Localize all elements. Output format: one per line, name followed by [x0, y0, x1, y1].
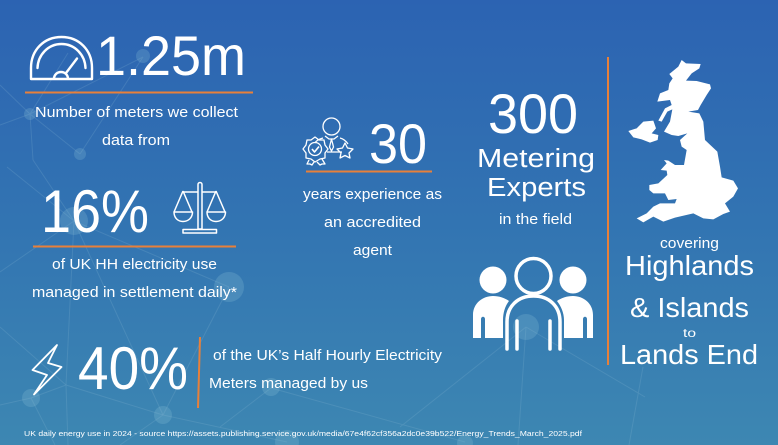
- caption: years experience: [303, 187, 442, 259]
- stat: 1.25m: 1.25m: [96, 24, 246, 87]
- caption: half hourly meters: Meters managed by us: [209, 376, 368, 392]
- panel: years experience stat: [303, 112, 442, 259]
- divider line: [33, 246, 236, 248]
- heading: metering experts: Metering: [477, 145, 595, 173]
- vertical divider: [198, 337, 200, 408]
- icon: balance scales: [174, 182, 226, 233]
- caption: years experience: agent: [353, 243, 392, 259]
- caption: meters: data from: [102, 133, 170, 149]
- coverage text: Highlands: [625, 250, 754, 281]
- divider line: [25, 92, 253, 94]
- panel: meters stat: [25, 24, 253, 149]
- panel: UK coverage: [620, 60, 758, 370]
- caption: years experience: an accredited: [324, 215, 421, 231]
- caption: electricity use: of UK HH electricity use: [52, 257, 217, 273]
- heading: metering experts: [477, 145, 595, 202]
- caption: years experience: years experience as: [303, 187, 442, 203]
- heading: metering experts: Experts: [487, 174, 586, 202]
- icon: accredited person with rosette and star: [303, 118, 353, 165]
- coverage text: covering: [660, 236, 719, 252]
- stat: 40%: 40%: [78, 335, 188, 402]
- icon: lightning bolt: [32, 345, 62, 394]
- icon: UK map: [628, 60, 738, 222]
- stat: 30: 30: [369, 112, 427, 175]
- coverage text: to: [683, 326, 696, 340]
- coverage text: & Islands: [630, 292, 749, 323]
- stat: 16%: 16%: [41, 178, 149, 245]
- divider line: [306, 170, 432, 172]
- panel: metering experts: [473, 82, 595, 349]
- caption: half hourly meters: [209, 348, 443, 392]
- caption: in the field: in the field: [499, 212, 572, 228]
- caption: half hourly meters: of the UK’s Half Hourly Electricity: [213, 348, 443, 364]
- icon: speedometer gauge: [31, 37, 92, 79]
- vertical divider: right column: [607, 57, 609, 365]
- panel: half hourly meters stat: [32, 335, 443, 408]
- panel: electricity use stat: [32, 178, 237, 301]
- caption: electricity use: managed in settlement daily*: [32, 285, 237, 301]
- caption: meters: Number of meters we collect: [35, 105, 238, 121]
- caption: electricity use: [32, 257, 237, 301]
- stat: 300: 300: [488, 82, 578, 145]
- caption: meters: [35, 105, 238, 149]
- icon: group of three people: [473, 258, 593, 349]
- background network pattern: [0, 49, 645, 445]
- footnote: source: UK daily energy use in 2024 - source https://assets.publishing.service.gov.uk/media/67e4f62cf356a2dc0e39b522/Energy_Trends_March_2025.pdf: [24, 429, 583, 438]
- coverage text: [620, 236, 758, 370]
- coverage text: Lands End: [620, 339, 758, 370]
